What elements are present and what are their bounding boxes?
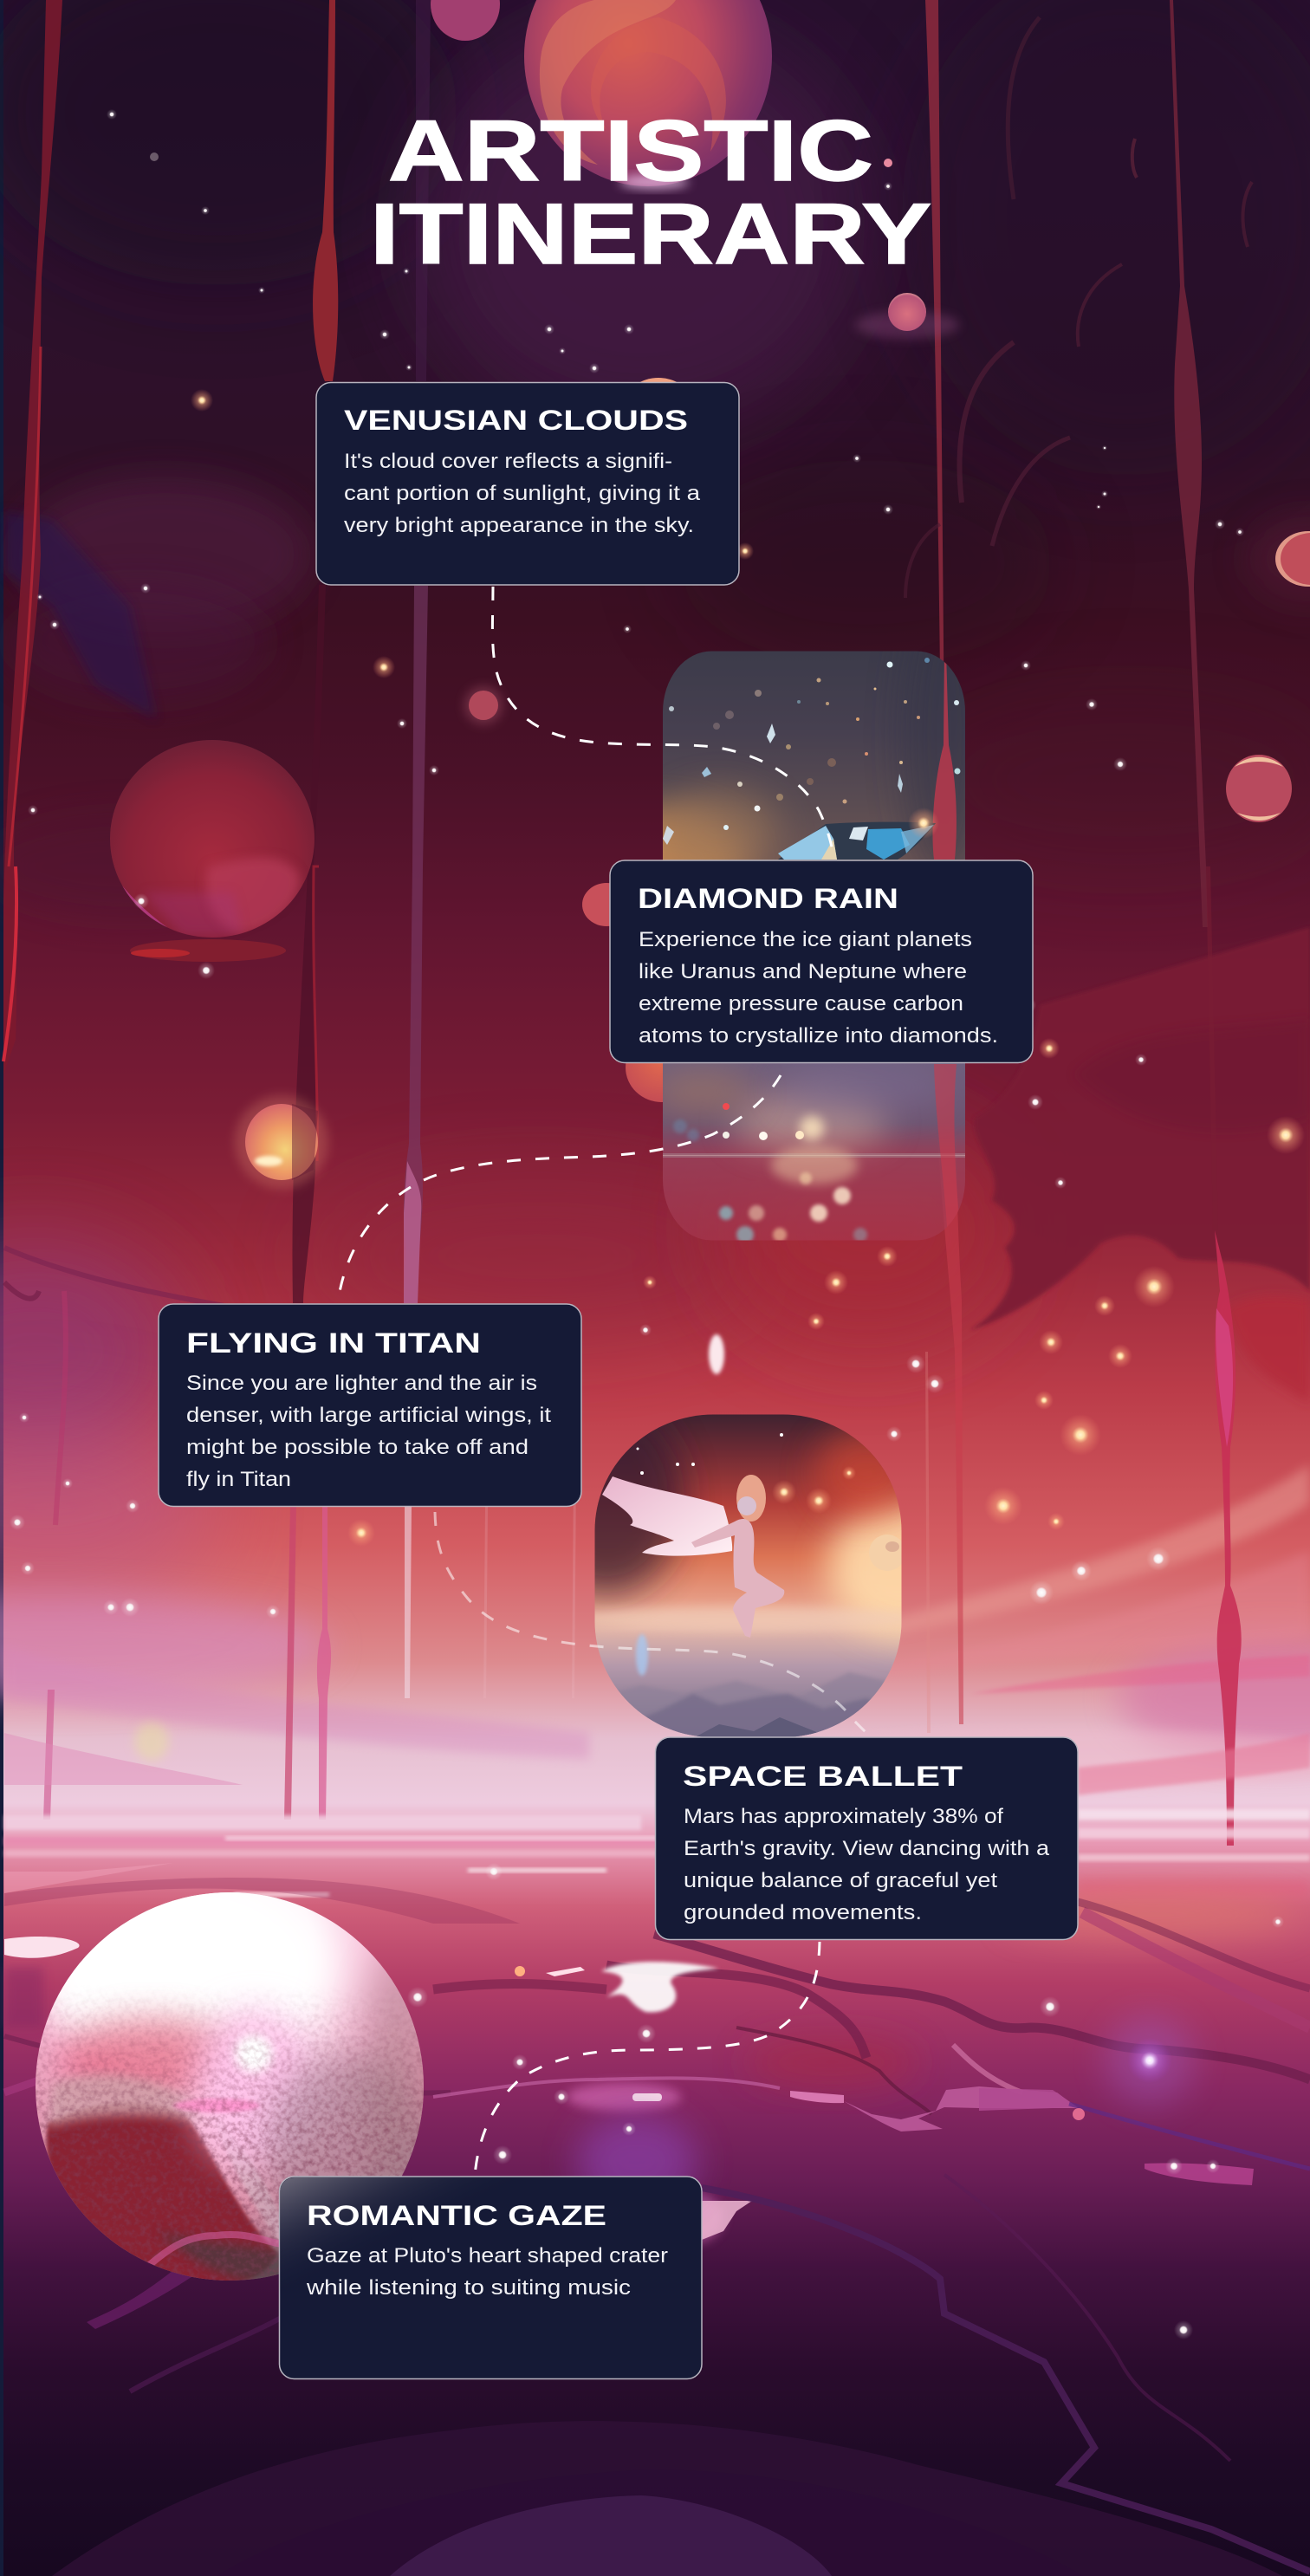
title: ARTISTIC [388, 102, 873, 198]
vertical streaks [3, 0, 62, 1074]
dashed connector: diamond rain to flying in titan [338, 1075, 781, 1303]
planet: golden [235, 1095, 328, 1189]
body text: fly in Titan [186, 1468, 291, 1491]
body text: Experience the ice giant planets [639, 928, 972, 951]
title [370, 102, 931, 282]
body text: extreme pressure cause carbon [639, 992, 963, 1015]
body text [186, 1372, 551, 1491]
coral water [1005, 1891, 1300, 1939]
figure [691, 1475, 784, 1638]
image: diamond rain [663, 652, 965, 1241]
heading: DIAMOND RAIN [638, 883, 898, 914]
right dark cloud [970, 927, 1310, 1330]
colour clouds [0, 0, 459, 286]
card: space ballet [655, 1737, 1078, 1939]
planets in the scene [108, 0, 1310, 1189]
bokeh [887, 662, 892, 667]
body text [639, 928, 998, 1048]
lower swirl lines [944, 2175, 1230, 2461]
body text: Gaze at Pluto's heart shaped crater [307, 2244, 668, 2268]
body text: atoms to crystallize into diamonds. [639, 1024, 998, 1048]
planet: right edge [1248, 516, 1310, 602]
dashed connector: flying in titan to space ballet [435, 1512, 872, 1738]
body text [684, 1805, 1050, 1924]
heading: FLYING IN TITAN [186, 1327, 481, 1359]
body text: denser, with large artificial wings, it [186, 1404, 551, 1427]
body text: like Uranus and Neptune where [639, 960, 967, 983]
body text: Since you are lighter and the air is [186, 1372, 537, 1395]
planet: large red [108, 740, 315, 962]
body text: might be possible to take off and [186, 1436, 529, 1459]
body text: unique balance of graceful yet [684, 1869, 997, 1892]
body text: Earth's gravity. View dancing with a [684, 1837, 1050, 1860]
planet: pluto [35, 1872, 429, 2287]
wings [602, 1476, 732, 1556]
body text [344, 450, 701, 537]
dashed connector: venusian clouds to diamond rain [492, 587, 834, 860]
body text: cant portion of sunlight, giving it a [344, 482, 701, 505]
planet: top small [431, 0, 500, 41]
mountains [619, 1672, 885, 1728]
planet: right lower [1226, 755, 1292, 822]
planet: left of diamond card [582, 883, 631, 926]
body text [306, 2244, 668, 2300]
card: venusian clouds [316, 383, 739, 585]
planet: top large [524, 0, 772, 189]
water streaks [4, 1733, 243, 1785]
body text: grounded movements. [684, 1901, 922, 1924]
title: ITINERARY [370, 185, 931, 282]
diamond gem [778, 808, 939, 860]
card: diamond rain [610, 860, 1033, 1062]
purple glows [576, 2114, 697, 2209]
planet: behind first card [627, 378, 690, 423]
body text: It's cloud cover reflects a signifi- [344, 450, 672, 473]
body text: very bright appearance in the sky. [344, 514, 694, 537]
dark ripples [654, 1934, 1310, 2080]
pink river [790, 2091, 844, 2103]
body text: while listening to suiting music [306, 2276, 631, 2300]
card: romantic gaze [279, 2177, 702, 2379]
moon [870, 1535, 901, 1551]
dashed connector: space ballet to romantic gaze [475, 1942, 820, 2176]
heading: VENUSIAN CLOUDS [344, 405, 688, 436]
card: flying in titan [159, 1304, 581, 1506]
planet: small path [464, 686, 503, 724]
planet: pink near title [855, 293, 959, 339]
image: flying figure [594, 1414, 901, 1736]
heading: ROMANTIC GAZE [307, 2200, 606, 2231]
heading: SPACE BALLET [683, 1761, 963, 1792]
body text: Mars has approximately 38% of [684, 1805, 1003, 1828]
faint arcs [1008, 17, 1040, 199]
planet: under diamond card [626, 1033, 698, 1102]
